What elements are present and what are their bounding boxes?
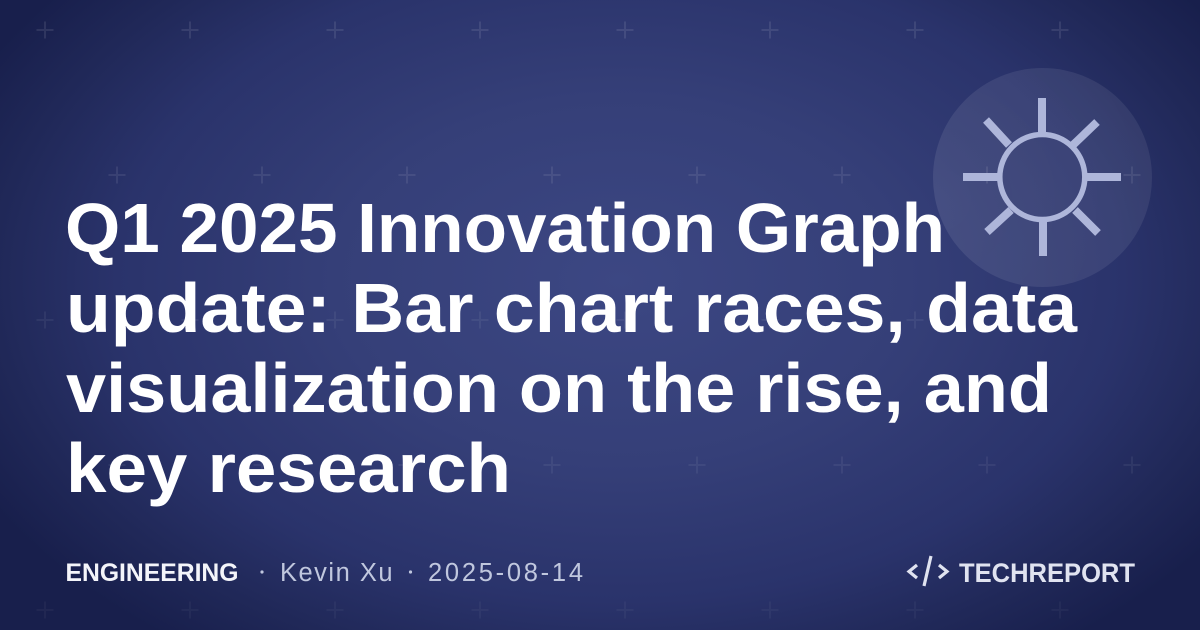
title	[65, 189, 1078, 507]
icon: code brackets	[909, 556, 947, 586]
title: update: Bar chart races, data	[66, 269, 1078, 347]
meta: category, author, date	[66, 559, 583, 587]
meta: category, author, date: ENGINEERING	[66, 559, 238, 587]
meta: category, author, date: Kevin Xu	[280, 559, 392, 587]
title: key research	[66, 429, 511, 507]
title: visualization on the rise, and	[66, 349, 1052, 427]
title: Q1 2025 Innovation Graph	[65, 189, 945, 267]
logo: TECHREPORT: TECHREPORT	[959, 558, 1135, 588]
icon: sun in circle	[933, 68, 1152, 287]
meta: category, author, date: 2025-08-14	[428, 559, 583, 587]
